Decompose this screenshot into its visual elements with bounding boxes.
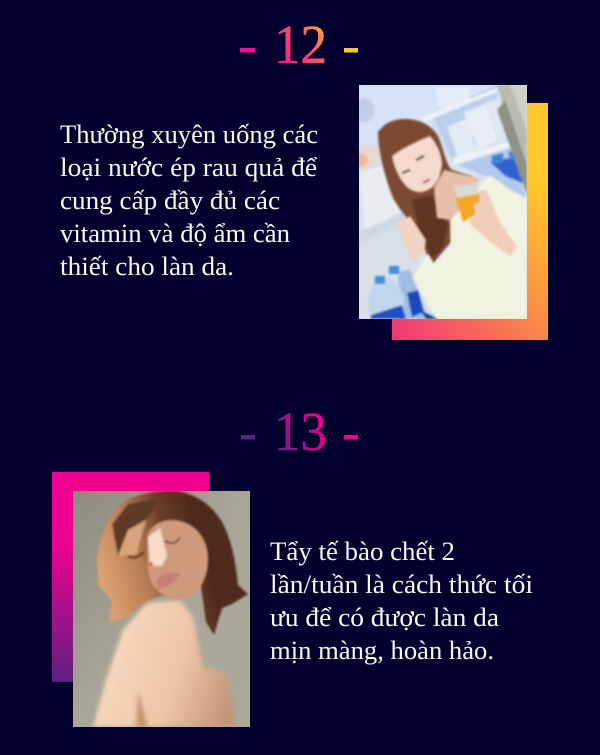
text block: tip 13: ưu để có được làn da [270, 602, 499, 632]
hair [97, 491, 248, 635]
heading: number 13 [241, 401, 358, 462]
text block: tip 13: Tẩy tế bào chết 2 [270, 536, 455, 566]
text block: tip 12: loại nước ép rau quả để [60, 152, 317, 182]
text block: tip 12: cung cấp đầy đủ các [60, 185, 280, 215]
text block: tip 12: vitamin và độ ẩm cần [60, 218, 290, 248]
heading: number 12: 12 [274, 14, 327, 75]
photo: woman with juice at the fridge [356, 85, 527, 327]
sweater [413, 175, 527, 319]
text block: tip 12: Thường xuyên uống các [60, 119, 318, 149]
text block: tip 13: mịn màng, hoàn hảo. [270, 635, 494, 665]
photo: woman with exfoliated skin [73, 491, 250, 727]
face and skin [392, 136, 517, 262]
text block: tip 13: lần/tuần là cách thức tối [270, 569, 533, 599]
panel: gradient frame behind photo 12 [392, 103, 548, 340]
panel: gradient frame behind photo 13 [52, 472, 209, 682]
text block: tip 12: thiết cho làn da. [60, 251, 234, 281]
hair [378, 119, 473, 264]
heading: number 13: 13 [274, 401, 327, 462]
juice glass [454, 184, 492, 222]
heading: number 12 [240, 14, 358, 75]
bottles [368, 264, 438, 319]
face [128, 520, 208, 600]
shoulder and body [93, 600, 237, 727]
